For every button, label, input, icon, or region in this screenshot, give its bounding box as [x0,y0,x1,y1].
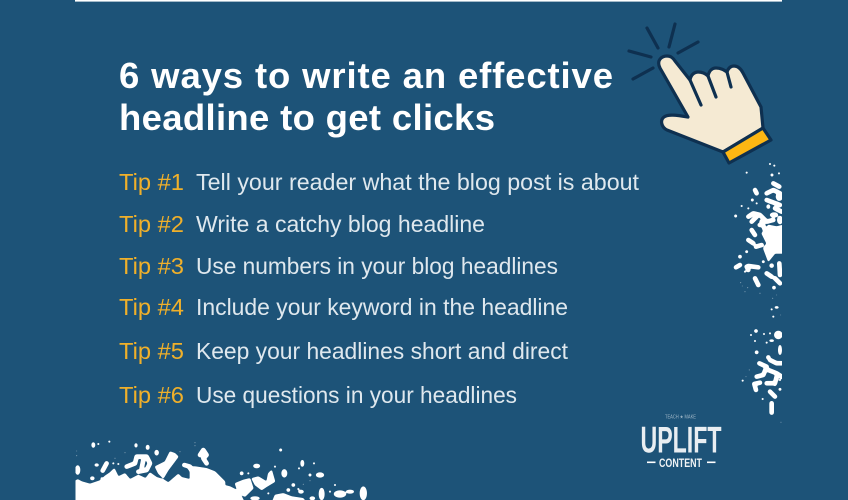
logo: Uplift Content: CONTENT [659,458,702,470]
logo: Uplift Content: UPLIFT [640,420,722,460]
tip 5: Keep your headlines short and direct [196,338,569,364]
tip 4: Include your keyword in the headline [196,294,568,320]
tip 5: Tip #5 [119,338,184,364]
title: headline to get clicks [119,97,495,138]
icon: pointing hand [629,24,771,163]
tip list [119,169,640,408]
tip 6: Use questions in your headlines [196,382,517,408]
top white strip [75,0,782,2]
tip 4: Tip #4 [119,294,184,320]
right splatter [734,163,783,423]
tip 6: Tip #6 [119,382,184,408]
logo: Uplift Content: TEACH ★ MAKE [665,414,697,420]
title [119,55,613,138]
title: 6 ways to write an effective [119,55,613,96]
tip 2: Write a catchy blog headline [196,211,485,237]
tip 1: Tip #1 [119,169,184,195]
logo: Uplift Content [640,414,722,470]
bottom left splatter [72,441,367,500]
tip 1: Tell your reader what the blog post is about [196,169,640,195]
tip 3: Use numbers in your blog headlines [196,253,558,279]
tip 3: Tip #3 [119,253,184,279]
tip 2: Tip #2 [119,211,184,237]
